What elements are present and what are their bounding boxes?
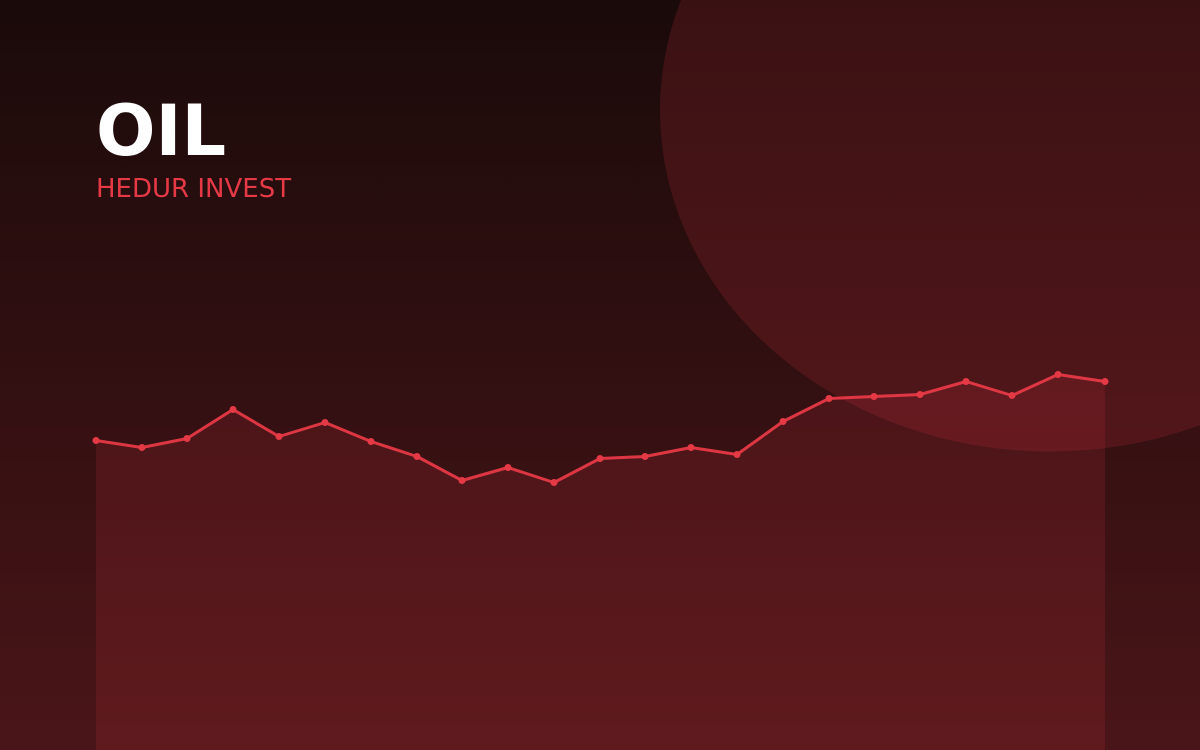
decorative ellipse top right bbox=[660, 0, 1200, 452]
line chart bbox=[92, 371, 1108, 486]
subtitle: HEDUR INVEST bbox=[96, 174, 291, 204]
area under line chart bbox=[96, 374, 1105, 750]
title: OIL bbox=[96, 90, 226, 172]
